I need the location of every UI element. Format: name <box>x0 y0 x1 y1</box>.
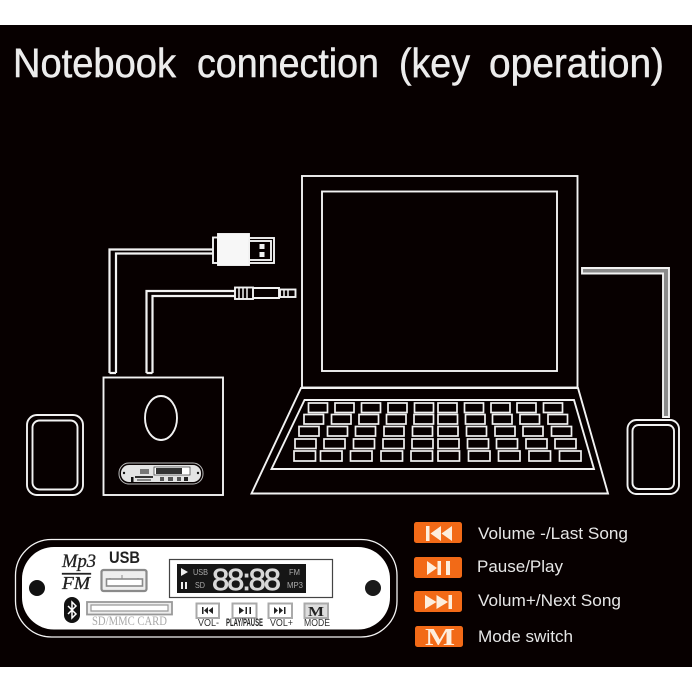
panel: MP3 module front <box>16 540 397 637</box>
LCD frame <box>170 560 332 598</box>
button: mode: MODE <box>304 617 330 629</box>
button: next <box>268 604 293 629</box>
title: connection <box>197 40 379 86</box>
left mounting hole <box>29 580 45 596</box>
laptop keyboard <box>294 403 581 461</box>
title <box>13 40 664 86</box>
USB label: USB <box>109 548 140 567</box>
button: next: VOL+ <box>270 617 293 629</box>
right speaker <box>628 420 679 494</box>
SD card slot <box>87 602 172 614</box>
Mp3 FM logo: Mp3 <box>61 551 96 572</box>
button: previous: VOL- <box>198 617 219 629</box>
LCD display: USB <box>193 567 208 577</box>
panel outline <box>16 540 397 637</box>
legend row: pause play: Pause/Play <box>477 557 563 576</box>
legend row: mode <box>415 625 573 651</box>
legend row: pause play <box>414 557 563 578</box>
button: mode: M <box>308 605 324 620</box>
LCD display: SD <box>195 580 205 590</box>
Mp3 FM logo: FM <box>61 573 91 593</box>
title: operation) <box>489 40 664 86</box>
LCD display: MP3 <box>287 580 303 590</box>
mini MP3 panel on amplifier box <box>119 463 203 484</box>
audio jack plug <box>235 288 296 299</box>
legend row: next <box>414 591 621 612</box>
left speaker <box>27 415 83 495</box>
USB port <box>102 570 146 591</box>
legend row: mode: Mode switch <box>478 627 573 646</box>
title: Notebook <box>13 40 176 86</box>
right mounting hole <box>365 580 381 596</box>
diagram: connection illustration <box>27 176 679 495</box>
amplifier box <box>104 378 223 495</box>
Mp3 FM logo <box>61 551 96 593</box>
laptop screen <box>302 176 578 388</box>
bluetooth icon <box>64 597 80 623</box>
button: previous <box>196 604 219 629</box>
audio cable <box>146 291 235 373</box>
legend row: previous: Volume -/Last Song <box>478 524 628 543</box>
SD card label: SD/MMC CARD <box>92 614 167 628</box>
legend row: mode: M <box>425 625 455 651</box>
LCD display: 88:88 <box>212 562 281 597</box>
button: play pause <box>226 604 263 629</box>
button: play pause: PLAY/PAUSE <box>226 617 263 629</box>
legend: key functions <box>414 522 628 651</box>
legend row: previous <box>414 522 628 543</box>
legend row: next: Volum+/Next Song <box>478 591 621 610</box>
title: (key <box>399 40 470 86</box>
LCD display: FM <box>289 567 300 577</box>
laptop base <box>252 388 608 494</box>
USB cable <box>110 250 213 373</box>
USB plug <box>213 234 274 265</box>
panel face <box>22 547 390 630</box>
LCD display <box>177 562 306 597</box>
speaker cable <box>582 268 669 417</box>
button: mode <box>304 604 330 629</box>
